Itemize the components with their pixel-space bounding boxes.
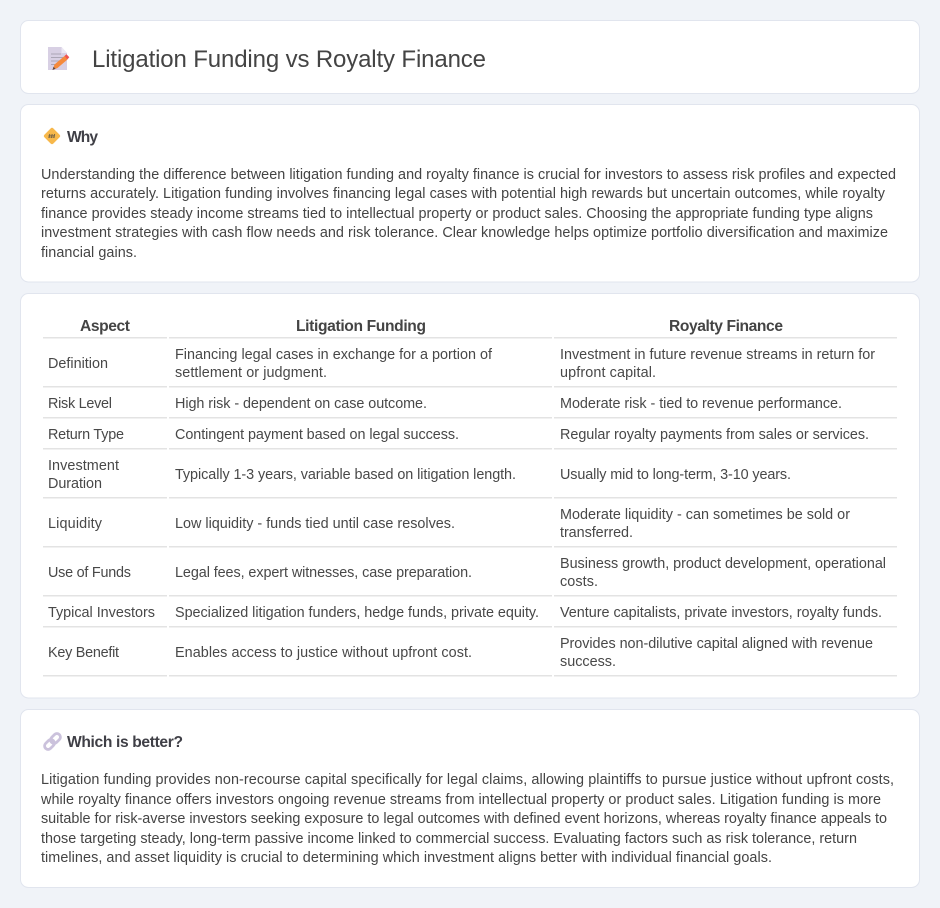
- row: key benefit: [48, 636, 873, 670]
- row: typical investors: Typical Investors: [48, 605, 155, 621]
- row: investment duration: Typically 1-3 years, variable based on litigation length.: [175, 467, 516, 483]
- row: key benefit: success.: [560, 654, 616, 670]
- table header: [80, 318, 783, 335]
- text block: which is better: [40, 772, 894, 866]
- text block: why: finance provides steady income streams tied to intellectual property or product sales. Choosing the appropriate funding type aligns: [41, 206, 873, 222]
- icon: warning diamond: [43, 127, 61, 145]
- row: definition: [48, 347, 875, 381]
- row: definition: Financing legal cases in exchange for a portion of: [175, 347, 493, 363]
- row: use of funds: costs.: [560, 574, 598, 590]
- row: definition: settlement or judgment.: [175, 365, 327, 381]
- row: liquidity: Moderate liquidity - can sometimes be sold or: [560, 507, 850, 523]
- text block: which is better: those targeting steady, long-term passive income linked to commercial success. Evaluating factors such as risk tolerance, return: [41, 831, 857, 847]
- row: investment duration: Duration: [48, 476, 102, 492]
- panel: why: [20, 104, 920, 282]
- panel: comparison table: [20, 294, 920, 698]
- row: typical investors: Specialized litigation funders, hedge funds, private equity.: [175, 605, 539, 621]
- row: liquidity: [48, 507, 850, 541]
- row: use of funds: Business growth, product development, operational: [560, 556, 886, 572]
- row: use of funds: Use of Funds: [48, 565, 131, 581]
- row: key benefit: Key Benefit: [48, 645, 119, 661]
- row: liquidity: transferred.: [560, 525, 633, 541]
- text block: why: returns accurately. Litigation funding involves financing legal cases with potential high rewards but uncertain outcomes, while royalty: [41, 186, 886, 202]
- row: definition: upfront capital.: [560, 365, 656, 381]
- row: key benefit: Provides non-dilutive capital aligned with revenue: [560, 636, 873, 652]
- row: typical investors: Venture capitalists, private investors, royalty funds.: [560, 605, 882, 621]
- panel: header: [20, 20, 920, 94]
- table header: Royalty Finance: [669, 318, 783, 335]
- heading: why: Why: [67, 129, 98, 146]
- row: investment duration: [48, 458, 791, 492]
- row: liquidity: Low liquidity - funds tied until case resolves.: [175, 516, 455, 532]
- row: return type: [48, 427, 869, 443]
- table header: Litigation Funding: [296, 318, 426, 335]
- row: risk level: High risk - dependent on case outcome.: [175, 396, 427, 412]
- row: risk level: Risk Level: [48, 396, 112, 412]
- text block: which is better: timelines, and asset liquidity is crucial to determining which investment aligns better with individual financial goals.: [41, 850, 772, 866]
- text block: which is better: suitable for risk-averse investors seeking exposure to legal outcomes with defined event horizons, whereas royalty finance appeals to: [41, 811, 887, 827]
- text block: which is better: Litigation funding provides non-recourse capital specifically for legal claims, allowing plaintiffs to pursue justice without upfront costs,: [41, 772, 894, 788]
- text block: why: Understanding the difference between litigation funding and royalty finance is crucial for investors to assess risk profiles and expected: [41, 167, 896, 183]
- row: risk level: Moderate risk - tied to revenue performance.: [560, 396, 842, 412]
- row: use of funds: Legal fees, expert witnesses, case preparation.: [175, 565, 472, 581]
- text block: why: [41, 167, 896, 261]
- text block: why: investment strategies with cash flow needs and risk tolerance. Clear knowledge helps optimize portfolio diversification and maximize: [41, 225, 888, 241]
- row: liquidity: Liquidity: [48, 516, 103, 532]
- text block: why: financial gains.: [41, 245, 137, 261]
- title: Litigation Funding vs Royalty Finance: [92, 46, 486, 73]
- table header: Aspect: [80, 318, 130, 335]
- row: definition: Investment in future revenue streams in return for: [560, 347, 875, 363]
- heading: which is better: Which is better?: [67, 734, 183, 751]
- icon: memo with pencil: [48, 47, 69, 70]
- row: investment duration: Investment: [48, 458, 119, 474]
- row: return type: Regular royalty payments from sales or services.: [560, 427, 869, 443]
- panel: which is better: [20, 710, 920, 888]
- row: key benefit: Enables access to justice without upfront cost.: [175, 645, 472, 661]
- text block: which is better: while royalty finance offers investors ongoing revenue streams from intellectual property or product sales. Litigation funding is more: [40, 792, 881, 808]
- row: use of funds: [48, 556, 886, 590]
- icon: link: [43, 732, 62, 751]
- row: risk level: [48, 396, 842, 412]
- row: return type: Contingent payment based on legal success.: [175, 427, 459, 443]
- row: return type: Return Type: [48, 427, 124, 443]
- row: typical investors: [48, 605, 882, 621]
- row: investment duration: Usually mid to long-term, 3-10 years.: [560, 467, 791, 483]
- row: definition: Definition: [48, 356, 108, 372]
